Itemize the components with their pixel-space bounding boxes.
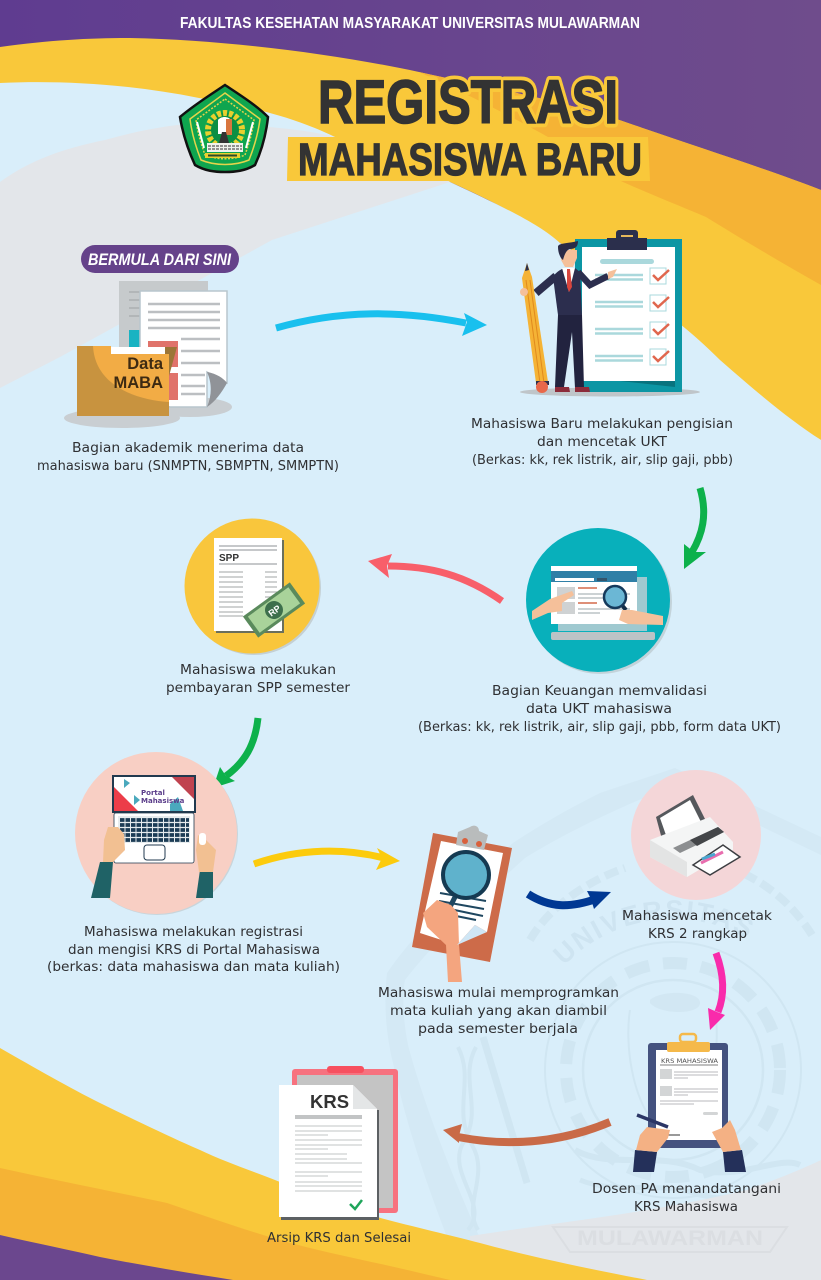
title line 2: MAHASISWA BARU (298, 134, 642, 185)
title line 2 backing (287, 137, 650, 181)
figure: man (536, 241, 617, 392)
step 6 caption: pada semester berjala (418, 1022, 578, 1037)
title (287, 68, 650, 185)
watermark text: universitas: UNIVERSITAS (552, 900, 752, 962)
step 1 caption: Bagian akademik menerima data (72, 441, 304, 456)
rupiah mark: RP (267, 603, 283, 619)
arrow: cyan (276, 313, 487, 336)
logo (180, 85, 268, 172)
title line 1: REGISTRASI (318, 68, 618, 136)
folder label: Data (127, 355, 164, 373)
step 7: printer icon (631, 770, 761, 900)
step 2: checklist icon (520, 230, 700, 396)
portal title: Portal (141, 789, 165, 797)
arrow: green down (684, 488, 706, 569)
header text: FAKULTAS KESEHATAN MASYARAKAT UNIVERSITAS MULAWARMAN (180, 15, 640, 32)
watermark text: mulawarman: MULAWARMAN (577, 1227, 763, 1250)
watermark seal (456, 864, 815, 1231)
step 3 caption: data UKT mahasiswa (526, 702, 672, 717)
step 5: portal laptop icon (75, 752, 238, 915)
step 4 caption: pembayaran SPP semester (166, 681, 351, 696)
step 5 caption: (berkas: data mahasiswa dan mata kuliah) (47, 960, 340, 975)
arrow: red left (368, 554, 502, 601)
badge: bermula dari sini: BERMULA DARI SINI (88, 250, 232, 269)
krs heading: KRS (310, 1091, 349, 1112)
step 7 caption (622, 909, 772, 942)
title line 1 outline: REGISTRASI (318, 68, 618, 136)
step 5 caption: dan mengisi KRS di Portal Mahasiswa (68, 943, 320, 958)
step 5: portal laptop icon: Mahasiswa (141, 797, 185, 805)
step 2 caption: Mahasiswa Baru melakukan pengisian (471, 417, 733, 432)
bottom colour bands (0, 1048, 821, 1280)
step 9: krs archive icon (279, 1066, 398, 1220)
step 8: krs signing icon (633, 1034, 746, 1172)
step 4 caption: Mahasiswa melakukan (180, 663, 336, 678)
step 1: data maba icon (64, 281, 232, 428)
step 7 caption: KRS 2 rangkap (648, 927, 747, 942)
form heading: KRS MAHASISWA (661, 1058, 719, 1065)
arrow: pink (708, 953, 725, 1030)
step 4: spp icon (184, 518, 321, 655)
step 5 caption (47, 925, 340, 975)
step 3 caption (418, 684, 781, 735)
step 2 caption (471, 417, 733, 468)
step 9 caption: Arsip KRS dan Selesai (267, 1231, 411, 1246)
step 4 caption (166, 663, 351, 696)
step 1: data maba icon: MABA (114, 374, 163, 392)
step 5 caption: Mahasiswa melakukan registrasi (84, 925, 303, 940)
arrow: green down-left (213, 718, 258, 788)
step 3 caption: Bagian Keuangan memvalidasi (492, 684, 707, 699)
figure: pencil (520, 263, 549, 393)
step 1 caption: mahasiswa baru (SNMPTN, SBMPTN, SMMPTN) (37, 459, 339, 474)
arrow: brown (443, 1122, 610, 1143)
spp heading: SPP (219, 553, 239, 564)
step 2 caption: (Berkas: kk, rek listrik, air, slip gaji, pbb) (472, 453, 733, 468)
step 8 caption: KRS Mahasiswa (634, 1200, 738, 1215)
step 1 caption (37, 441, 339, 474)
step 7 caption: Mahasiswa mencetak (622, 909, 772, 924)
step 3: validation icon (526, 528, 672, 674)
step 6 caption: mata kuliah yang akan diambil (390, 1004, 607, 1019)
step 6 caption (378, 986, 619, 1037)
arrow: yellow (254, 848, 400, 870)
step 2 caption: dan mencetak UKT (537, 435, 667, 450)
step 6: clipboard magnifier icon (412, 826, 512, 982)
arrow: navy (528, 891, 611, 909)
badge: bermula dari sini (81, 245, 239, 273)
step 8 caption: Dosen PA menandatangani (592, 1182, 781, 1197)
step 8 caption (592, 1182, 781, 1215)
step 6 caption: Mahasiswa mulai memprogramkan (378, 986, 619, 1001)
step 3 caption: (Berkas: kk, rek listrik, air, slip gaji, pbb, form data UKT) (418, 720, 781, 735)
